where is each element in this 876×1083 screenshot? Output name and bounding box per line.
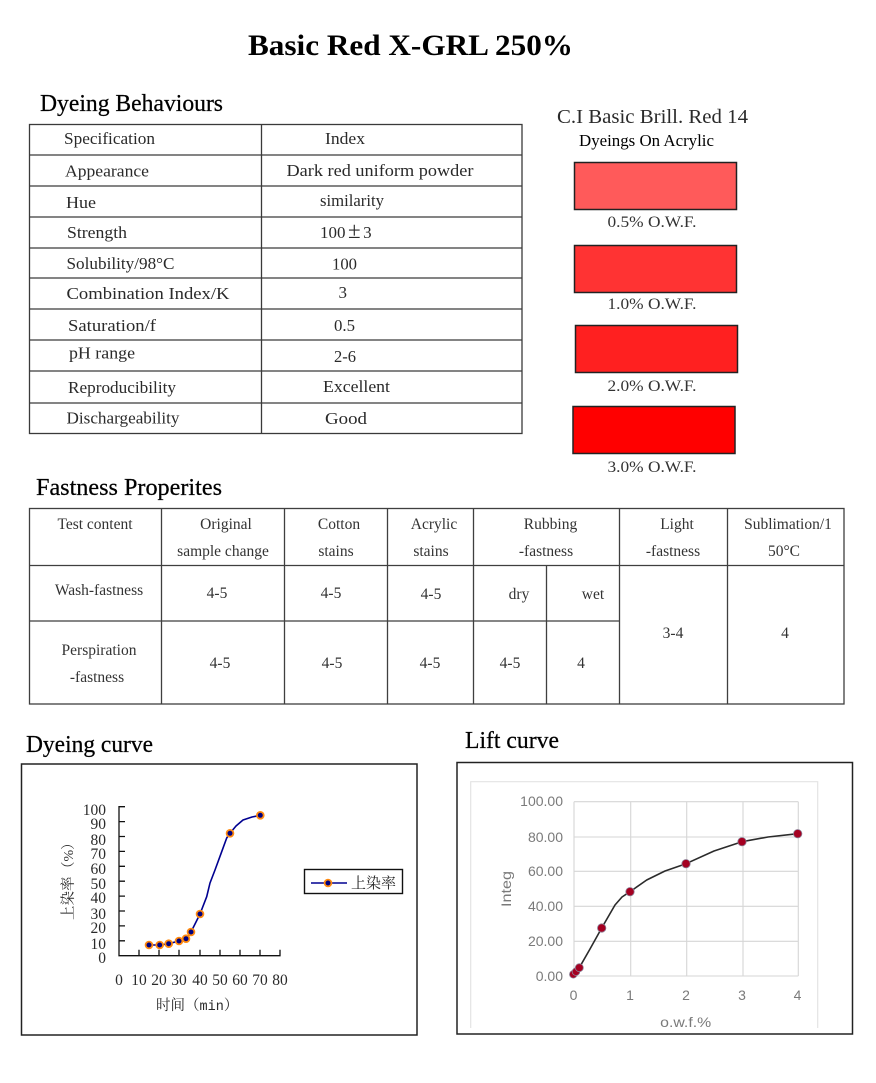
x-axis tick labels: 0: [570, 987, 578, 1003]
y-axis tick labels: 70: [90, 846, 106, 863]
table row: strength: [67, 218, 372, 243]
data markers: [146, 812, 264, 948]
table row: wash-fastness: 4-5: [321, 585, 342, 602]
table header row: Light: [660, 516, 694, 533]
table row: wash-fastness: [55, 582, 605, 603]
table header row: -fastness: [646, 543, 700, 560]
x-axis tick labels: 50: [212, 972, 228, 989]
table row: perspiration-fastness: 4-5: [322, 655, 343, 672]
x-axis tick labels: 80: [272, 972, 288, 989]
y-axis tick labels: 40.00: [528, 898, 563, 914]
table: dyeing behaviours: [29, 124, 522, 434]
heading: lift curve: Lift curve: [465, 727, 559, 754]
chart: lift curve: [457, 762, 852, 1034]
table row: dischargeability: Dischargeability: [66, 408, 180, 428]
y-axis title: 上染率（%）: [59, 836, 77, 920]
merged cell: light fastness value: 3-4: [663, 625, 684, 642]
table row: perspiration-fastness: 4-5: [420, 655, 441, 672]
x-axis tick labels: 3: [738, 987, 746, 1003]
table row: perspiration-fastness: -fastness: [70, 669, 124, 686]
y-axis tick labels: 30: [90, 906, 106, 923]
y-axis tick labels: 50: [90, 876, 106, 893]
data markers: [570, 830, 802, 978]
table header row: Test content: [57, 516, 133, 533]
y-axis tick labels: 100.00: [520, 793, 563, 809]
x-axis tick labels: [570, 987, 802, 1003]
x-axis tick labels: 40: [192, 972, 208, 989]
swatch: 2.0%: [576, 326, 738, 395]
table row: perspiration-fastness: [62, 642, 585, 686]
table header row: stains: [413, 543, 449, 560]
table row: solubility: [66, 254, 357, 274]
swatch: 0.5%: 0.5% O.W.F.: [608, 214, 696, 231]
chart: dyeing curve: [22, 764, 417, 1035]
swatch: 0.5%: [574, 162, 736, 231]
x-axis tick labels: 20: [151, 972, 167, 989]
y-axis tick labels: 0.00: [536, 968, 563, 984]
data line: [149, 815, 260, 945]
data line: [573, 834, 798, 974]
table header row: -fastness: [519, 543, 573, 560]
chart axes: [119, 807, 280, 956]
table: fastness properties: [29, 508, 844, 704]
table row: wash-fastness: 4-5: [421, 586, 442, 603]
table row: combination index: [66, 283, 347, 303]
table row: perspiration-fastness: 4-5: [500, 655, 521, 672]
table row: pH range: [69, 344, 356, 366]
table row: hue: Hue: [66, 193, 96, 212]
table row: specification: Index: [325, 129, 366, 148]
y-axis tick labels: 20: [90, 920, 106, 937]
table header row: Acrylic: [411, 516, 457, 533]
y-axis title: Integ: [498, 871, 514, 907]
table row: reproducibility: [68, 377, 390, 397]
y-axis tick labels: 40: [90, 890, 106, 907]
y-axis tick labels: 60: [90, 861, 106, 878]
x-axis title: 时间（min）: [156, 997, 238, 1015]
x-axis title: o.w.f.%: [660, 1014, 711, 1030]
heading: colour index name: C.I Basic Brill. Red 14: [557, 106, 748, 128]
table header row: Original: [200, 516, 252, 533]
table header row: 50°C: [768, 543, 800, 560]
y-axis tick labels: [520, 793, 563, 984]
y-axis tick labels: 20.00: [528, 933, 563, 949]
table row: dischargeability: [66, 408, 368, 428]
table row: saturation: Saturation/f: [68, 316, 156, 335]
table header row: Sublimation/1: [744, 516, 832, 533]
y-axis tick labels: 0: [98, 950, 106, 967]
y-axis tick labels: 80.00: [528, 829, 563, 845]
table row: combination index: Combination Index/K: [66, 284, 230, 303]
table row: reproducibility: Excellent: [323, 377, 390, 396]
table header row: stains: [318, 543, 354, 560]
table row: combination index: 3: [338, 283, 347, 302]
table row: wash-fastness: wet: [582, 586, 605, 603]
table row: perspiration-fastness: 4: [577, 655, 585, 672]
swatch: 1.0%: [574, 246, 736, 313]
legend: [304, 870, 402, 894]
table row: pH range: 2-6: [334, 347, 356, 366]
x-axis tick labels: 70: [252, 972, 268, 989]
y-axis tick labels: [83, 802, 106, 967]
table row: perspiration-fastness: 4-5: [210, 655, 231, 672]
x-axis tick labels: [115, 972, 288, 989]
table header row: sample change: [177, 543, 269, 560]
x-axis tick labels: 30: [171, 972, 187, 989]
table row: solubility: Solubility/98°C: [66, 254, 174, 273]
x-axis tick labels: 60: [232, 972, 248, 989]
x-axis tick labels: 4: [794, 987, 802, 1003]
heading: dyeing behaviours: Dyeing Behaviours: [40, 90, 223, 117]
table row: specification: Specification: [64, 129, 155, 148]
y-axis tick labels: 80: [90, 832, 106, 849]
table row: wash-fastness: Wash-fastness: [55, 582, 143, 599]
legend: 上染率: [351, 874, 396, 892]
swatch: 1.0%: 1.0% O.W.F.: [608, 296, 696, 313]
plot gridlines: [574, 802, 798, 976]
table header row: Cotton: [318, 516, 360, 533]
subheading: dyeings on acrylic: Dyeings On Acrylic: [579, 131, 714, 150]
table header row: [57, 516, 832, 560]
table row: solubility: 100: [332, 254, 357, 274]
y-axis tick labels: 60.00: [528, 863, 563, 879]
table row: dischargeability: Good: [325, 409, 368, 428]
table row: appearance: [65, 161, 474, 180]
merged cell: sublimation value: 4: [781, 625, 789, 642]
y-axis tick labels: 100: [83, 802, 106, 819]
table row: hue: similarity: [320, 191, 384, 210]
table row: strength: Strength: [67, 223, 128, 242]
swatch: 3.0%: 3.0% O.W.F.: [608, 459, 696, 476]
x-axis tick labels: 1: [626, 987, 634, 1003]
swatch: 3.0%: [573, 406, 735, 476]
table row: perspiration-fastness: Perspiration: [62, 642, 137, 659]
table row: hue: [66, 191, 384, 212]
table row: saturation: 0.5: [334, 316, 355, 335]
table header row: Rubbing: [524, 516, 577, 533]
heading: dyeing curve: Dyeing curve: [26, 731, 153, 758]
table row: wash-fastness: dry: [509, 586, 530, 603]
title: Basic Red X-GRL 250%: [248, 29, 573, 62]
table row: appearance: Dark red uniform powder: [286, 161, 474, 180]
x-axis tick labels: 0: [115, 972, 123, 989]
heading: fastness properties: Fastness Properites: [36, 474, 222, 501]
table row: specification: [64, 129, 366, 148]
table row: reproducibility: Reproducibility: [68, 378, 176, 397]
table row: saturation: [68, 316, 355, 335]
swatch: 2.0%: 2.0% O.W.F.: [608, 378, 696, 395]
y-axis tick labels: 10: [90, 936, 106, 953]
x-axis tick labels: 2: [682, 987, 690, 1003]
table row: appearance: Appearance: [65, 162, 149, 180]
y-axis tick labels: 90: [90, 816, 106, 833]
table row: wash-fastness: 4-5: [207, 585, 228, 602]
table row: strength: 100±3: [320, 218, 372, 243]
x-axis tick labels: 10: [131, 972, 147, 989]
table row: pH range: pH range: [69, 344, 135, 362]
